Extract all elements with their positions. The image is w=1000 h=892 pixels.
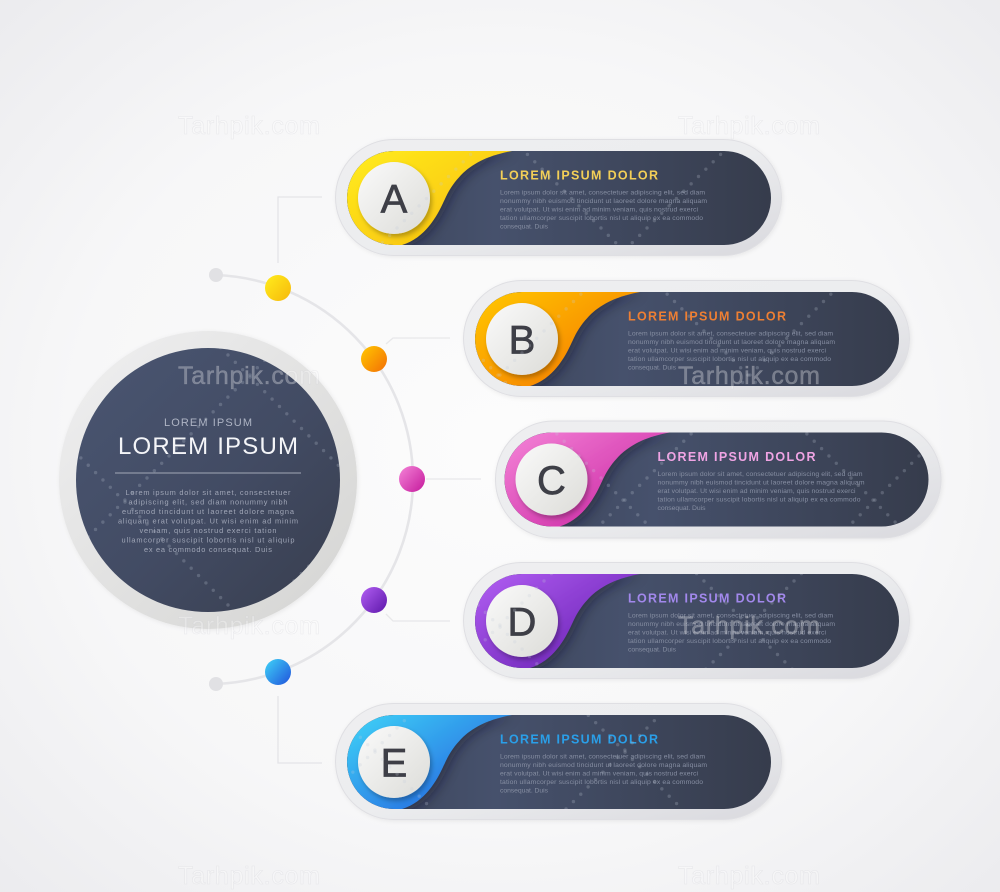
central heading: LOREM IPSUM (118, 433, 298, 460)
panel: B: tation ullamcorper suscipit lobortis nisl ut aliquip ex ea commodo (628, 356, 831, 363)
panel: A: LOREM IPSUM DOLOR (500, 168, 658, 182)
panel: C: LOREM IPSUM DOLOR (658, 450, 816, 464)
node C pink (399, 466, 425, 492)
panel: A: nonummy nibh euismod tincidunt ut laoreet dolore magna aliquam (500, 198, 707, 205)
node E blue (265, 659, 291, 685)
panel: D: nonummy nibh euismod tincidunt ut laoreet dolore magna aliquam (628, 621, 835, 628)
panel: A (336, 140, 782, 256)
panel: E: E (381, 742, 407, 786)
panel: E: erat volutpat. Ut wisi enim ad minim veniam, quis nostrud exerci (500, 770, 698, 778)
watermarks: Tarhpik.com (678, 612, 820, 640)
connector C (426, 478, 481, 480)
central body text: euismod tincidunt ut laoreet dolore magna (122, 507, 295, 516)
arc end node (209, 677, 223, 691)
central body text: adipiscing elit, sed diam nonummy nibh (128, 498, 288, 507)
panel: B: B (509, 318, 535, 362)
panel: B: erat volutpat. Ut wisi enim ad minim veniam, quis nostrud exerci (628, 348, 826, 354)
watermarks: Tarhpik.com (178, 862, 320, 890)
panel: D: consequat. Duis (628, 646, 677, 654)
panel: C: Lorem ipsum dolor sit amet, consectetuer adipiscing elit, sed diam (658, 471, 863, 478)
node A yellow (265, 275, 291, 301)
panel: A: A (381, 178, 408, 222)
panel: A: tation ullamcorper suscipit lobortis nisl ut aliquip ex ea commodo (500, 215, 703, 222)
panel: D: erat volutpat. Ut wisi enim ad minim veniam, quis nostrud exerci (628, 630, 826, 636)
watermarks: Tarhpik.com (678, 112, 820, 140)
panel: A: erat volutpat. Ut wisi enim ad minim veniam, quis nostrud exerci (500, 206, 698, 214)
panel: D: tation ullamcorper suscipit lobortis nisl ut aliquip ex ea commodo (628, 638, 831, 645)
connector D (386, 614, 450, 621)
panel: E: LOREM IPSUM DOLOR (500, 732, 658, 746)
connector B (386, 338, 450, 344)
panel: C: C (537, 459, 566, 503)
panel: B: nonummy nibh euismod tincidunt ut laoreet dolore magna aliquam (628, 339, 835, 346)
node D purple (361, 587, 387, 613)
node B orange (361, 346, 387, 372)
panel: A: Lorem ipsum dolor sit amet, consectetuer adipiscing elit, sed diam (500, 190, 705, 196)
panel: E: nonummy nibh euismod tincidunt ut laoreet dolore magna aliquam (500, 762, 707, 769)
central body text: ex ea commodo consequat. Duis (144, 545, 272, 554)
central subtitle: LOREM IPSUM (164, 417, 252, 429)
central body text (118, 488, 298, 554)
panel: C: tation ullamcorper suscipit lobortis nisl ut aliquip ex ea commodo (658, 496, 861, 504)
watermarks: Tarhpik.com (178, 112, 320, 140)
connector E (278, 696, 322, 763)
panel: B (464, 280, 910, 396)
panel: E (336, 704, 782, 820)
panel: C: erat volutpat. Ut wisi enim ad minim veniam, quis nostrud exerci (658, 488, 856, 495)
central body text: veniam, quis nostrud exerci tation (140, 526, 276, 535)
central body text: aliquam erat volutpat. Ut wisi enim ad minim (118, 516, 298, 526)
central divider (115, 472, 301, 474)
panel: D: LOREM IPSUM DOLOR (628, 592, 786, 606)
watermarks: Tarhpik.com (678, 362, 820, 390)
central body text: Lorem ipsum dolor sit amet, consectetuer (126, 488, 291, 497)
connector A (278, 197, 322, 263)
timeline arc (216, 275, 413, 684)
panel: D (464, 562, 910, 678)
panel: C: consequat. Duis (658, 505, 706, 512)
panel: D: Lorem ipsum dolor sit amet, consectetuer adipiscing elit, sed diam (628, 612, 833, 620)
arc start node (209, 268, 223, 282)
panel: B: consequat. Duis (628, 364, 677, 372)
panel: E: tation ullamcorper suscipit lobortis nisl ut aliquip ex ea commodo (500, 779, 703, 786)
watermarks: Tarhpik.com (178, 612, 320, 640)
panel: A: consequat. Duis (500, 224, 549, 230)
panel: B: Lorem ipsum dolor sit amet, consectetuer adipiscing elit, sed diam (628, 330, 833, 338)
watermarks: Tarhpik.com (178, 362, 320, 390)
panel: D: D (508, 600, 536, 644)
panel: central circle (59, 331, 357, 629)
watermarks: Tarhpik.com (678, 862, 820, 890)
panel: E: consequat. Duis (500, 788, 549, 794)
panel: E: Lorem ipsum dolor sit amet, consectetuer adipiscing elit, sed diam (500, 754, 705, 760)
watermarks (178, 112, 820, 890)
panel: C (496, 421, 941, 538)
panel: B: LOREM IPSUM DOLOR (628, 310, 786, 324)
panel: C: nonummy nibh euismod tincidunt ut laoreet dolore magna aliquam (658, 480, 865, 486)
central body text: ullamcorper suscipit lobortis nisl ut aliquip (122, 536, 294, 545)
